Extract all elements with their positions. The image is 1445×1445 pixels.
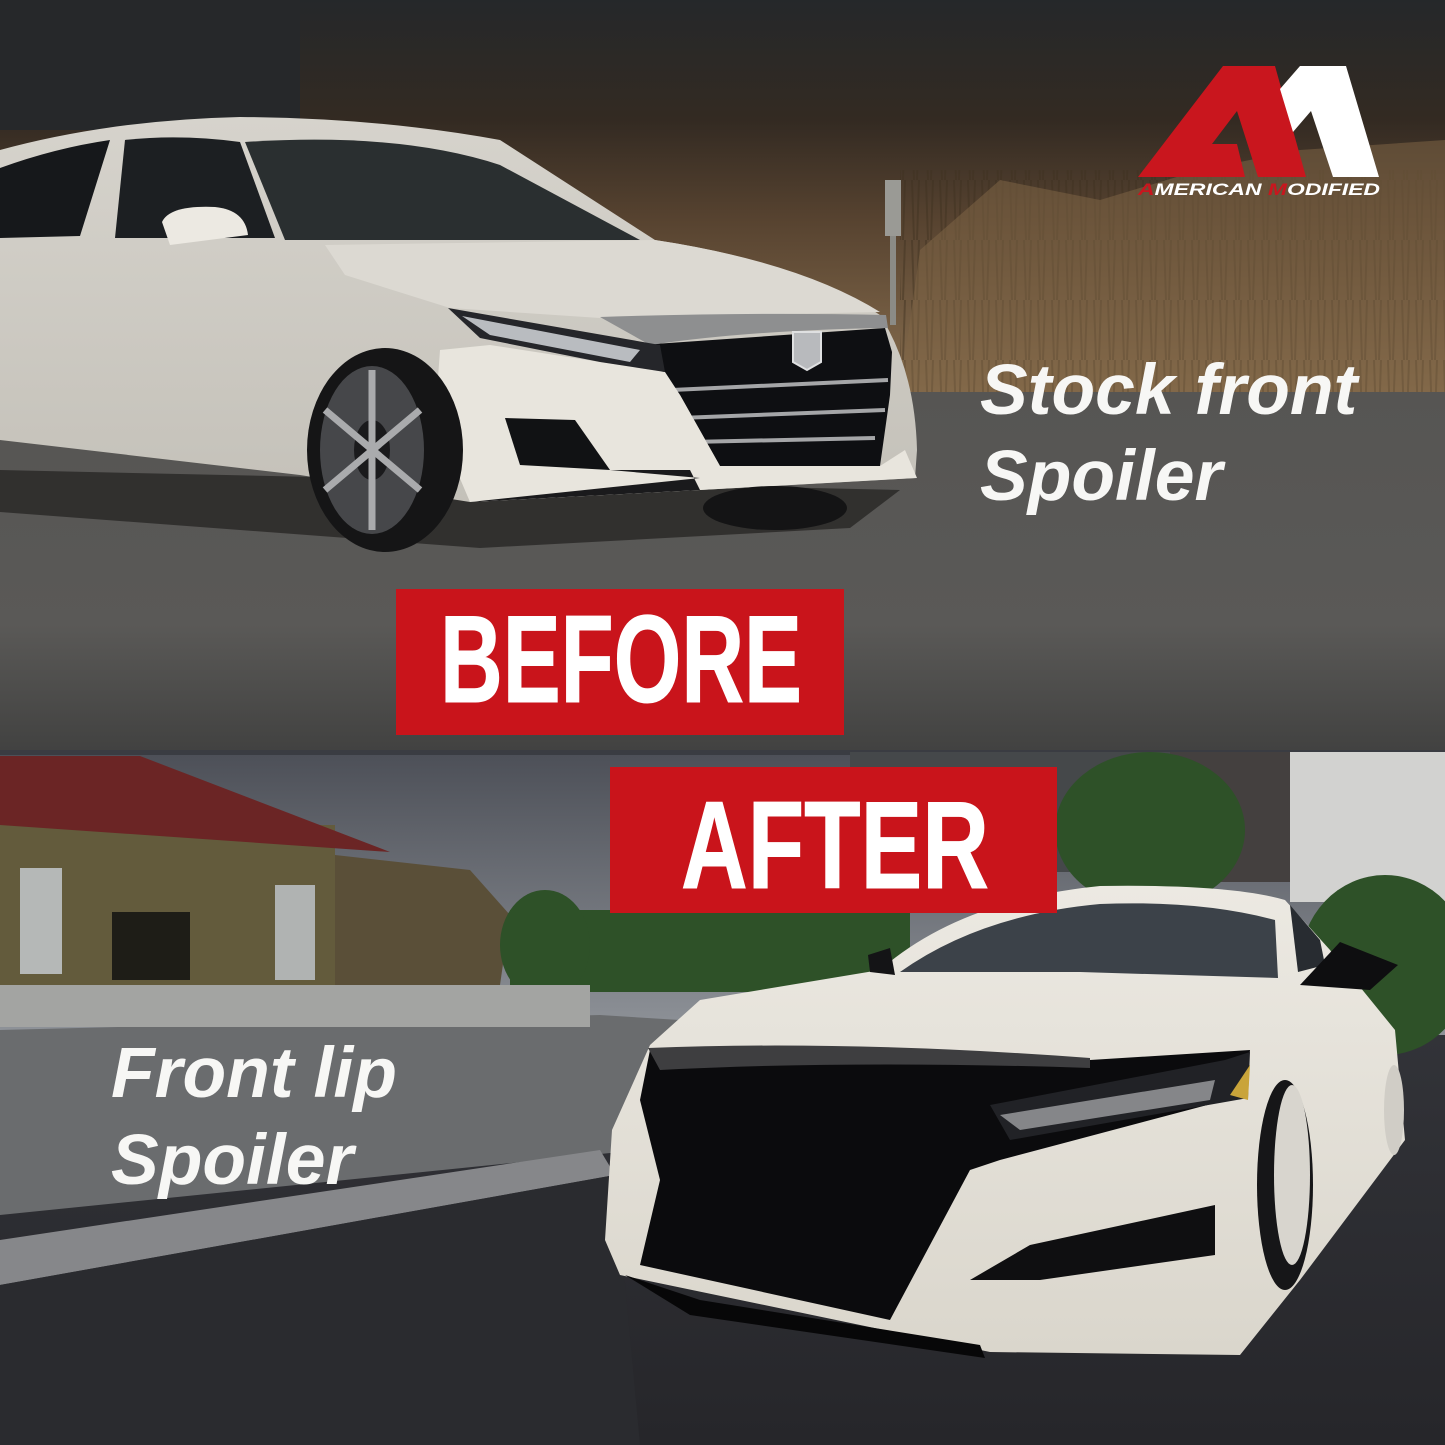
icon: white M stroke (1280, 66, 1379, 177)
label: Stock front Spoiler: Spoiler (980, 436, 1227, 516)
logo wordmark: A MERICAN M ODIFIED (1137, 180, 1380, 199)
building (0, 756, 510, 985)
wheel (307, 348, 463, 552)
label: Front lip Spoiler: Front lip (111, 1033, 397, 1113)
badge: BEFORE: BEFORE (440, 591, 802, 729)
badge: BEFORE (396, 589, 844, 735)
label: Front lip Spoiler (111, 1033, 397, 1200)
illustration: white sedan, stock front (0, 117, 917, 552)
badge: AFTER: AFTER (681, 777, 989, 915)
label: Stock front Spoiler: Stock front (980, 350, 1361, 430)
icon: red A (1138, 66, 1306, 177)
logo: American Modified (1137, 66, 1380, 199)
label: Stock front Spoiler (980, 350, 1361, 516)
trees (500, 752, 1445, 1055)
panel: after photo (0, 750, 1445, 1445)
panel: before photo (0, 0, 1445, 750)
front lip (625, 1275, 985, 1358)
label: Front lip Spoiler: Spoiler (111, 1120, 358, 1200)
sign post (885, 180, 901, 325)
illustration: white sedan, front lip spoiler (605, 886, 1405, 1358)
